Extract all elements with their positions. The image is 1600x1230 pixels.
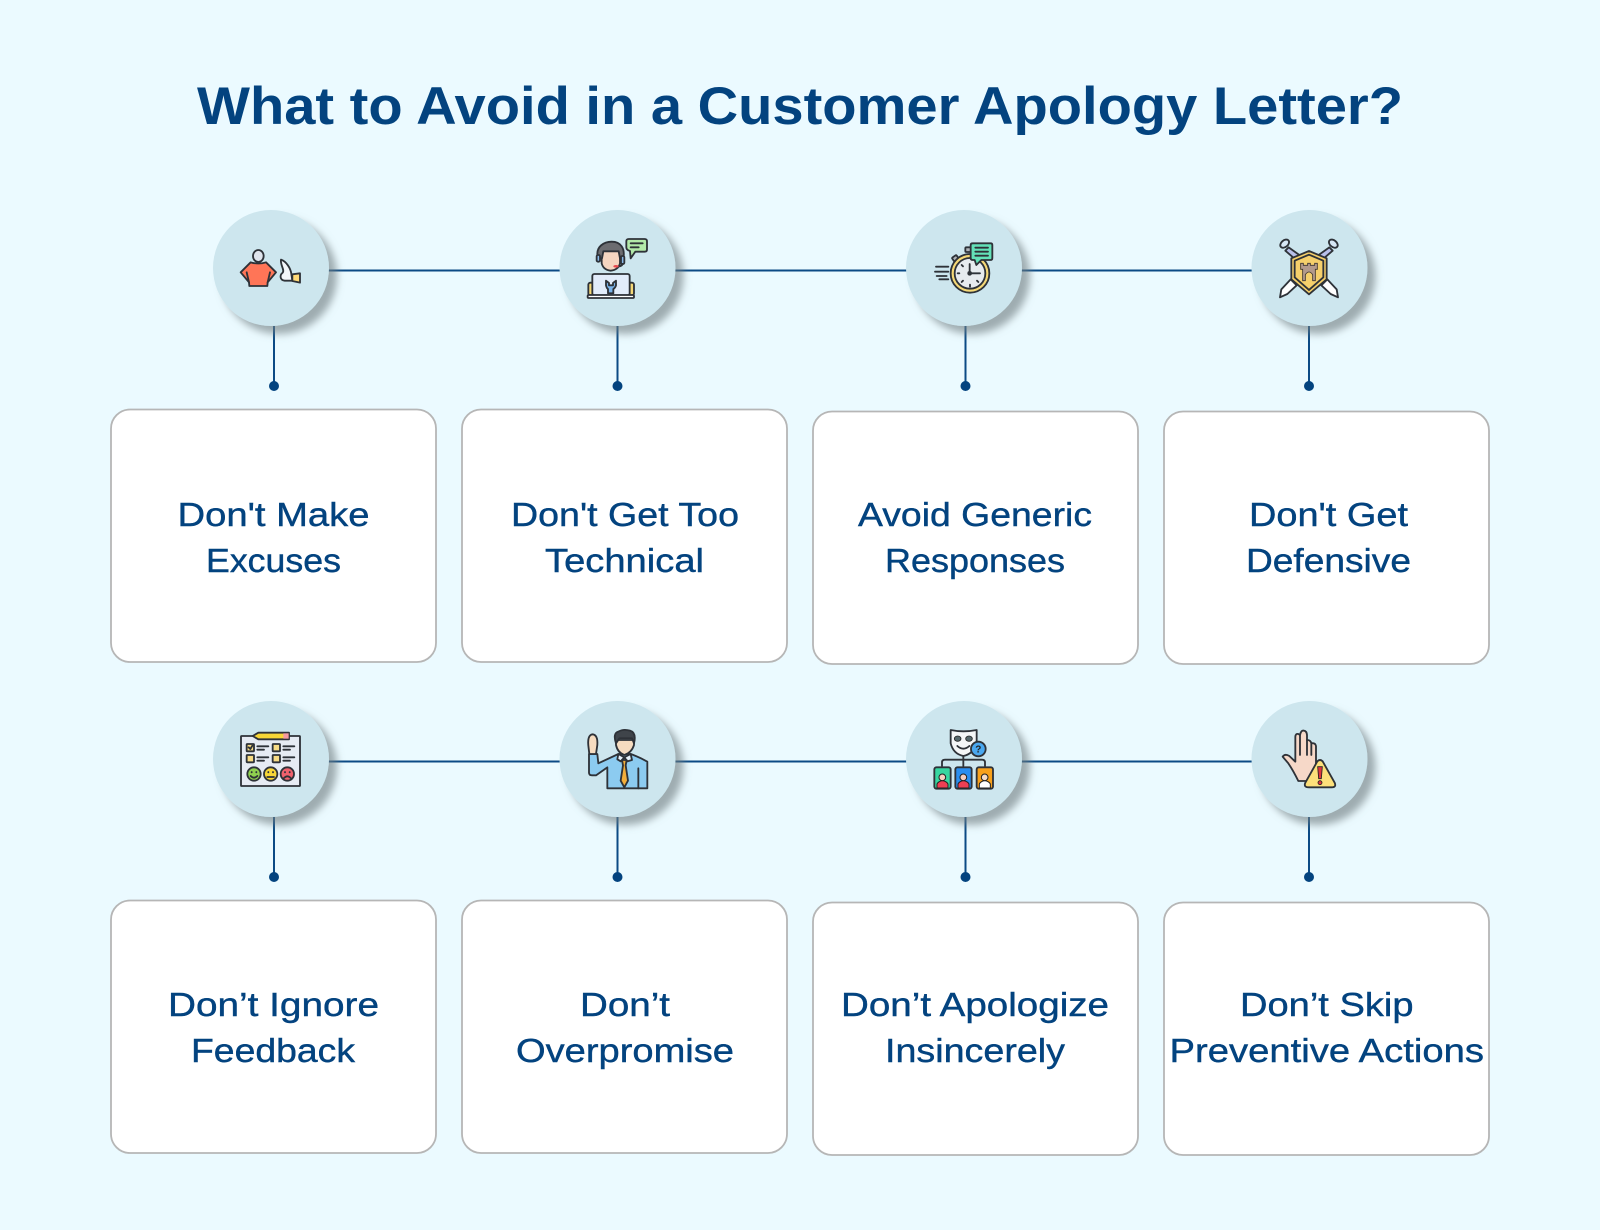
connector with dot: [1304, 817, 1314, 882]
card text: Don’t: [580, 986, 670, 1023]
card: [813, 412, 1138, 664]
card text: Don't Make: [178, 496, 370, 533]
card text: [1170, 986, 1484, 1069]
connector with dot: [960, 817, 970, 882]
card text: Don’t Apologize: [841, 986, 1109, 1023]
step: Don't Overpromise: [462, 701, 787, 1153]
card text: Responses: [885, 542, 1065, 579]
connector: bottom row: [328, 760, 1252, 762]
card text: [1246, 496, 1411, 579]
card text: [168, 986, 379, 1069]
connector with dot: [960, 326, 970, 391]
step: Avoid Generic Responses: [813, 210, 1138, 664]
card text: Don't Get Too: [511, 496, 739, 533]
card text: Feedback: [191, 1032, 356, 1069]
card text: [841, 986, 1109, 1069]
icon: stopwatch with message: [935, 243, 992, 293]
connector with dot: [269, 326, 279, 391]
card text: Technical: [545, 542, 704, 579]
icon: support agent with laptop: [588, 239, 647, 298]
card: [462, 900, 787, 1153]
icon circle: [1252, 701, 1368, 817]
icon circle: [906, 701, 1022, 817]
card text: [858, 496, 1092, 579]
card text: Avoid Generic: [858, 496, 1092, 533]
connector with dot: [1304, 326, 1314, 391]
step: Don't Make Excuses: [111, 210, 436, 662]
card text: Don’t Ignore: [168, 986, 379, 1023]
card text: Insincerely: [885, 1032, 1066, 1069]
step: Don't Apologize Insincerely: [813, 701, 1138, 1155]
icon: mask over people cards: ?: [975, 745, 981, 756]
card text: Defensive: [1246, 542, 1411, 579]
card: [111, 900, 436, 1153]
icon circle: [1252, 210, 1368, 326]
card text: Preventive Actions: [1170, 1032, 1484, 1069]
icon circle: [560, 701, 676, 817]
step: Don't Skip Preventive Actions: [1164, 701, 1489, 1155]
card text: [516, 986, 734, 1069]
card text: Don’t Skip: [1240, 986, 1414, 1023]
connector with dot: [612, 326, 622, 391]
icon circle: [213, 210, 329, 326]
card text: [511, 496, 739, 579]
card text: Don't Get: [1249, 496, 1408, 533]
card: [1164, 412, 1489, 664]
card text: Excuses: [206, 542, 341, 579]
icon circle: [560, 210, 676, 326]
connector with dot: [612, 817, 622, 882]
card: [111, 410, 436, 662]
icon: businessman raising hand: [588, 730, 647, 788]
title: What to Avoid in a Customer Apology Letter?: [197, 77, 1403, 136]
step: Don't Ignore Feedback: [111, 701, 436, 1153]
connector with dot: [269, 817, 279, 882]
icon: stop hand with warning triangle: [1283, 731, 1335, 787]
icon: mask over people cards: [934, 730, 993, 789]
connector: top row: [328, 270, 1252, 272]
card text: Overpromise: [516, 1032, 734, 1069]
step: Don't Get Defensive: [1164, 210, 1489, 664]
card text: [178, 496, 370, 579]
step: Don't Get Too Technical: [462, 210, 787, 662]
icon: person and refusing hand: [241, 250, 300, 286]
icon: feedback clipboard with faces: [241, 733, 300, 786]
icon circle: [906, 210, 1022, 326]
card: [813, 902, 1138, 1155]
card: [1164, 902, 1489, 1155]
icon circle: [213, 701, 329, 817]
card: [462, 410, 787, 662]
icon: crossed swords and castle shield: [1279, 238, 1339, 297]
